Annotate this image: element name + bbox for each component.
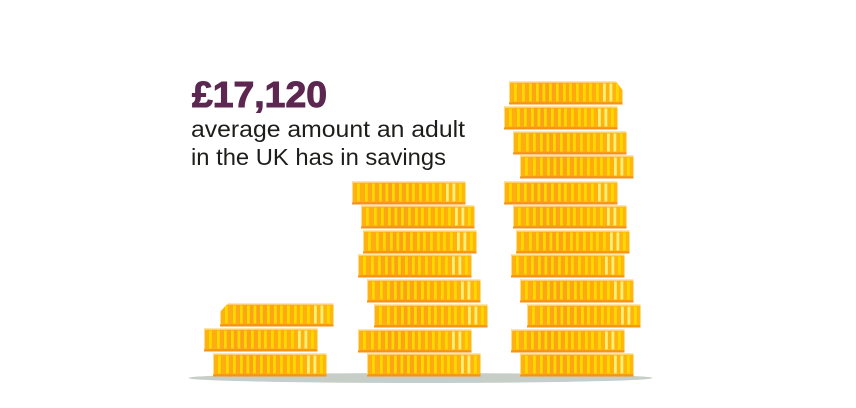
stat description: average amount an adult [191,116,465,142]
ground shadow [188,373,652,383]
coin stack: medium [352,181,488,376]
stat description [191,116,465,170]
stat headline: £17,120 [192,74,327,115]
coin stack: small [204,302,334,376]
stat description: in the UK has in savings [191,144,446,170]
coin stack: tall [504,80,640,376]
